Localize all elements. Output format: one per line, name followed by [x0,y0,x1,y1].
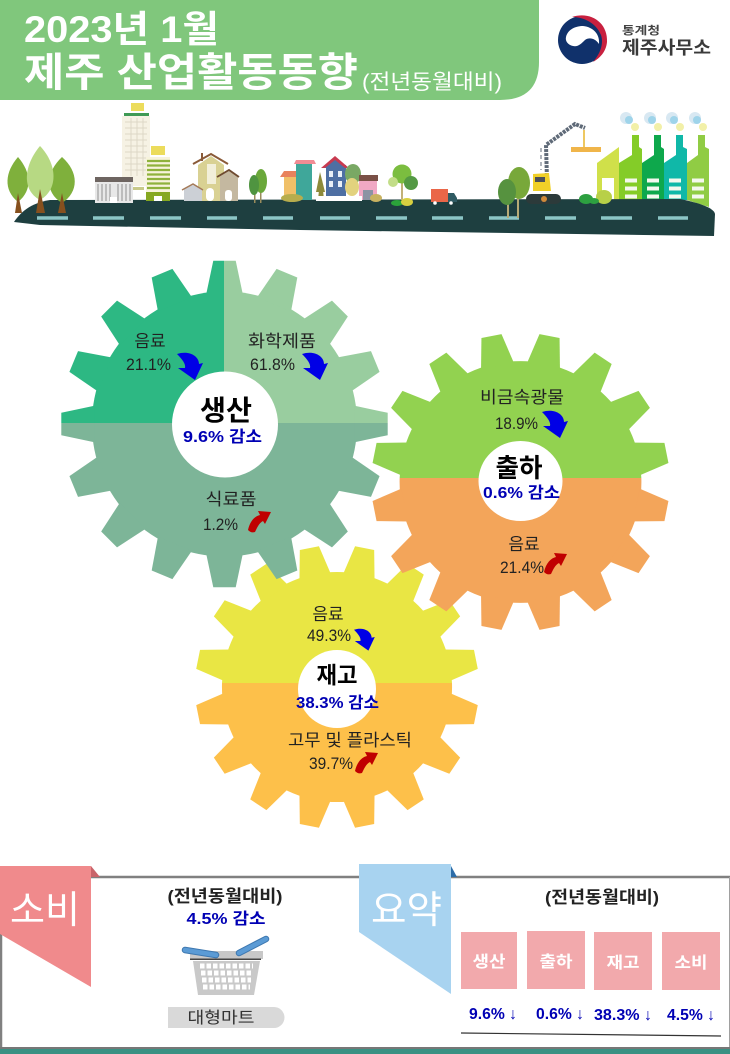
title note: (전년동월대비) [362,71,502,94]
low grey building [95,177,133,203]
box: shipment: 출하 [540,953,573,971]
box: production: 생산 [472,953,506,971]
value: consumption: 4.5% ↓ [667,1007,715,1024]
beverages decrease [307,605,375,651]
beverages increase: 21.4% [500,558,544,577]
title line 2: 제주 산업활동동향 [24,51,358,95]
construction trees [498,167,530,218]
food increase: 식료품 [206,490,256,509]
production labels [126,332,328,534]
logo text large: 제주사무소 [622,38,711,58]
beverages decrease: 49.3% [307,626,351,645]
panel: consumption [0,866,284,1028]
houses [182,153,239,201]
box: inventory: 재고 [606,954,640,972]
truck [431,189,457,205]
beverages decrease [126,332,203,380]
value: production: 9.6% ↓ [469,1006,517,1023]
factory bushes [579,190,612,204]
production heading: 9.6% 감소 [183,428,262,446]
inventory heading [296,662,379,712]
rubber and plastics increase: 고무 및 플라스틱 [288,731,412,750]
title banner [0,0,539,100]
colourful town [280,156,382,202]
box: shipment [527,931,585,989]
production heading [183,395,262,446]
consumption value: 4.5% 감소 [186,910,266,928]
shipment heading: 출하 [496,453,543,483]
chemicals decrease [248,332,328,380]
inventory labels [288,605,412,773]
factory smoke [620,112,707,131]
panel: summary [359,864,721,1036]
gear: production [61,261,388,587]
summary note: (전년동월대비) [545,888,659,907]
gear: shipment [372,334,668,630]
beverages increase [500,535,567,577]
tower building [122,103,150,190]
production heading: 생산 [200,395,252,426]
icon: shopping basket [185,939,266,995]
consumption ribbon: 소비 [10,890,80,932]
box: consumption: 소비 [674,954,708,972]
consumption ribbon [0,866,100,987]
beverages decrease: 음료 [134,332,166,351]
shipment heading: 0.6% 감소 [483,484,560,502]
trees near houses [249,169,267,203]
logo: Statistics Korea Jeju office [558,15,711,64]
beverages decrease: 음료 [312,605,344,624]
gear: inventory [196,546,478,828]
inventory gear body [196,546,478,828]
value: shipment: 0.6% ↓ [536,1006,584,1023]
chemicals decrease: 화학제품 [248,332,316,351]
production gear body [61,261,388,587]
summary ribbon: 요약 [371,890,442,932]
box: production [461,932,517,989]
chemicals decrease: 61.8% [250,355,295,374]
title line 1: 2023년 1월 [24,9,219,50]
inventory heading: 38.3% 감소 [296,694,379,712]
beverages increase: 음료 [508,535,540,554]
street illustration [7,103,715,236]
shipment gear body [372,334,668,630]
box: inventory [594,932,652,990]
green striped building [146,146,170,201]
label: large mart: 대형마트 [188,1009,254,1027]
summary ribbon [359,864,457,994]
inventory heading: 재고 [316,662,358,688]
non-metal minerals decrease [480,388,568,438]
value: inventory: 38.3% ↓ [594,1007,652,1024]
label: large mart [168,1007,284,1028]
tree and bushes [388,164,418,206]
box: consumption [662,932,720,990]
shipment heading [483,453,560,502]
crane [526,124,601,204]
non-metal minerals decrease: 비금속광물 [480,388,564,407]
food increase [203,490,271,534]
rubber and plastics increase [288,731,412,773]
logo text small: 통계청 [622,23,660,37]
factories [597,135,709,207]
road [14,199,715,236]
consumption note: (전년동월대비) [168,887,282,906]
rubber and plastics increase: 39.7% [309,754,353,773]
non-metal minerals decrease: 18.9% [495,414,538,433]
bottom frame [0,877,730,1054]
roadside trees [7,146,75,213]
beverages decrease: 21.1% [126,355,171,374]
shipment labels [480,388,568,577]
food increase: 1.2% [203,515,238,534]
